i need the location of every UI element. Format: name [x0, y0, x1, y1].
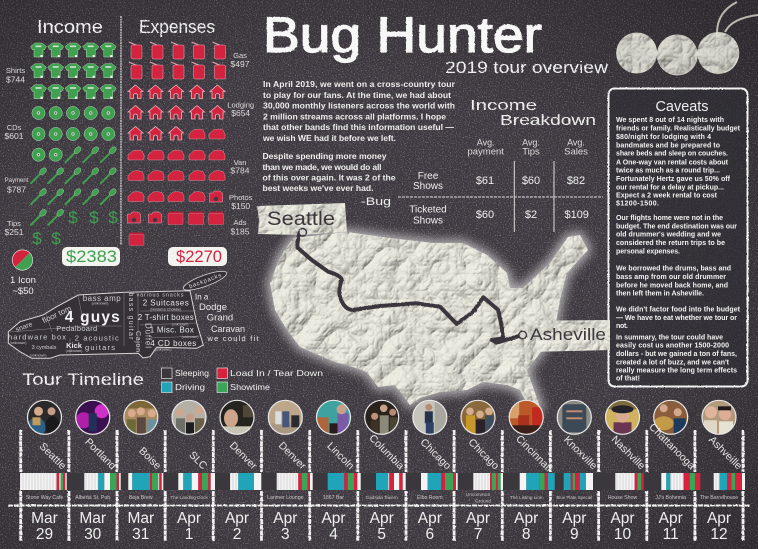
icons: tips dollar signs: $	[89, 208, 99, 227]
caveats text: We borrowed the drums, bass and	[616, 266, 731, 273]
intro text block	[262, 79, 456, 193]
caveats text: budget. The end destination was our	[616, 223, 737, 230]
subtitle: 2019 tour overview	[445, 58, 609, 77]
intro text block: than we made, we would do all	[262, 162, 382, 172]
icons: tips dollar signs	[32, 208, 118, 248]
icons: lodging houses	[128, 85, 225, 140]
label tape: Asheville: Asheville	[530, 325, 606, 344]
caveats text: — We have to eat whether we tour or	[616, 315, 737, 322]
city names: Ashveille	[706, 434, 744, 472]
timeline dates: Apr	[418, 510, 442, 527]
timeline dates: Mar	[31, 510, 58, 527]
caveats text: dollars - but we gained a ton of fans,	[616, 351, 737, 358]
city names: Portland	[82, 436, 118, 472]
intro text block: 30,000 monthly listeners across the world with	[263, 100, 455, 110]
city names: Denver	[227, 440, 260, 472]
timeline dates	[31, 510, 731, 543]
icons: CDs	[32, 106, 115, 161]
timeline legend: Driving	[175, 382, 205, 392]
packing labels: bass guitar	[127, 292, 134, 340]
heading: income breakdown	[470, 97, 596, 129]
city names: Lincoln	[324, 440, 356, 472]
timeline dates: 2	[233, 526, 241, 543]
venue names: The Landing Dock	[170, 495, 208, 500]
icon: paper bug	[616, 2, 758, 76]
packing labels: 4 CD boxes	[150, 339, 196, 348]
timeline dates: 11	[663, 526, 679, 543]
packing labels: (unknown)	[172, 322, 188, 326]
column headers: Avg.	[567, 138, 585, 148]
packing labels: (Holdall & Cholldie)	[150, 308, 181, 312]
category labels: expenses: $654	[231, 108, 250, 118]
timeline dates: Apr	[466, 510, 490, 527]
backpacks bubble	[182, 268, 228, 294]
timeline activity bars	[20, 473, 745, 490]
timeline dates: Apr	[370, 510, 394, 527]
venue names: Blue Plate Special	[556, 495, 592, 500]
van caption: Caravan	[211, 324, 245, 334]
timeline dates: 30	[84, 526, 102, 543]
label tape: Seattle	[257, 203, 347, 235]
caveats text: old drummer's wedding and we	[616, 232, 721, 239]
icons: tips dollar signs: $	[32, 229, 42, 248]
caveats text: really measure the long term effects	[616, 367, 737, 374]
caveats text: friends or family. Realistically budget	[616, 125, 741, 132]
photo: Chattanooga	[654, 400, 688, 434]
timeline dates: 29	[36, 526, 53, 543]
venue names: Stone Way Cafe	[26, 495, 63, 501]
packing labels: guitars	[85, 343, 115, 352]
backpacks bubble: backpacks	[188, 273, 222, 290]
icons: tips dollar signs: $	[68, 208, 78, 227]
venue names: Larimer Lounge	[267, 495, 304, 501]
timeline legend: Sleeping	[175, 368, 209, 378]
column headers: payment	[467, 146, 504, 158]
income breakdown table	[398, 97, 603, 232]
label tape: Seattle: Seattle	[267, 209, 335, 230]
expense icon grid	[128, 42, 226, 246]
row: ticketed shows: $60	[476, 209, 494, 221]
category labels: income: $601	[5, 131, 24, 141]
column headers	[467, 138, 588, 158]
row: free shows: $61	[476, 175, 494, 187]
city names: SLC	[186, 449, 210, 472]
caveats text: $1200-1500.	[616, 200, 659, 207]
legend: one icon value	[10, 250, 36, 297]
label tape: Asheville	[517, 320, 610, 352]
timeline dates: 6	[425, 526, 434, 543]
venue names: Gadsida Tavern	[366, 495, 398, 500]
packing labels: floor tom	[41, 304, 73, 325]
photo: Nashville	[606, 400, 640, 434]
timeline dates: Apr	[610, 510, 635, 527]
venue names: 1867 Bar	[323, 495, 344, 501]
venue names: Alberta St. Pub	[75, 495, 110, 501]
city names: Seattle	[37, 441, 68, 472]
income icon grid	[30, 43, 118, 248]
caveats text: bandmates and be prepared to	[616, 142, 720, 149]
timeline dates: Apr	[225, 510, 249, 527]
icons: gas tags	[129, 42, 226, 79]
panel: caveats	[608, 88, 748, 386]
heading: income: Income	[37, 17, 103, 37]
photo: Asheville	[702, 400, 736, 434]
category labels: income	[5, 66, 29, 237]
category labels: income: Tips	[7, 219, 21, 228]
caveats text: In summary, the tour could have	[616, 334, 723, 341]
caveats text: bass amp from our old drummer	[616, 274, 726, 281]
photo: Portland	[76, 400, 110, 434]
row: ticketed shows	[409, 204, 589, 226]
caveats text: Fortunately Hertz gave us 50% off	[616, 176, 731, 183]
timeline dates: Apr	[273, 510, 297, 527]
timeline dates: 1	[185, 526, 193, 543]
packing labels: Kick	[66, 341, 83, 350]
icons: tips dollar signs: $	[51, 229, 61, 248]
timeline chalk grid	[8, 430, 750, 541]
table grid	[398, 161, 603, 232]
timeline legend: Load In / Tear Down	[230, 368, 323, 378]
city names: Columbia	[367, 432, 406, 472]
packing labels: 3 cymbals	[32, 345, 57, 351]
city names	[37, 421, 744, 474]
intro text block: Despite spending more money	[262, 151, 387, 161]
caveats text: $80/night for lodging with 4	[616, 134, 711, 141]
photo: Lincoln	[316, 400, 350, 434]
map of USA with route	[257, 203, 610, 415]
city names: Chicago	[466, 436, 501, 472]
caveats text	[616, 117, 741, 383]
caveats text: not.	[616, 323, 628, 330]
category labels: expenses: $497	[231, 59, 250, 69]
city names: Knoxville	[561, 434, 599, 472]
intro text block: In April 2019, we went on a cross-country tour	[263, 79, 456, 89]
timeline dates: 9	[570, 526, 579, 543]
icons: cameras	[128, 191, 222, 223]
photo: Columbia	[365, 400, 399, 434]
timeline dates: Apr	[321, 510, 346, 527]
intro text block: of this over again. It was 2 of the	[262, 172, 396, 182]
panel: van packing diagram	[8, 268, 259, 358]
van caption: Dodge	[199, 302, 227, 313]
column headers: Sales	[564, 146, 588, 158]
category labels: expenses: $150	[231, 201, 250, 211]
icons: shirts	[30, 43, 116, 99]
category labels: expenses: $784	[231, 166, 250, 176]
timeline legend	[162, 368, 323, 392]
category labels: expenses: Lodging	[227, 100, 254, 110]
timeline dates: 5	[377, 526, 386, 543]
intro text block: to play for our fans. At the time, we had about	[263, 90, 451, 100]
caveats text: our rental for a delay at pickup...	[616, 184, 724, 191]
timeline dates: Apr	[562, 510, 586, 527]
packing labels: 1 Misc. Box	[150, 326, 194, 334]
heading: caveats: Caveats	[656, 98, 708, 115]
venue names: The Barrelhouse	[700, 495, 738, 501]
city names: Chattanooga	[646, 421, 697, 472]
caveats text: considered the return trips to be	[616, 240, 725, 247]
caveats text: easily cost us another 1500-2000	[616, 343, 729, 350]
photo: Chicago Apr 7	[461, 400, 495, 434]
category labels: income: Payment	[5, 178, 29, 184]
packing labels: various snacks	[136, 292, 184, 298]
venue names: Ground	[475, 498, 491, 504]
icons: tips dollar signs: $	[108, 208, 118, 227]
caveats text: We spent 8 out of 14 nights with	[616, 117, 724, 124]
van caption: we could fit	[206, 334, 259, 343]
photo: SLC	[172, 400, 206, 434]
timeline dates: Apr	[514, 510, 538, 527]
timeline legend: Showtime	[230, 382, 270, 392]
venue names: JJ's Bohemia	[655, 495, 686, 501]
heading: income breakdown: Breakdown	[500, 112, 596, 129]
row: free shows	[413, 171, 585, 192]
timeline dates: 3	[281, 526, 290, 543]
packing labels: (unknown)	[155, 348, 171, 352]
row: free shows: $60	[522, 175, 540, 187]
caveats text: We didn't factor food into the budget	[616, 307, 741, 314]
category labels: expenses: Photos	[229, 193, 253, 202]
city names: Denver	[276, 440, 309, 472]
venue names: Elbo Room	[417, 495, 443, 501]
row: free shows: Free	[418, 171, 439, 182]
row: free shows: Shows	[413, 181, 443, 192]
column headers: Avg.	[522, 138, 540, 148]
venue names: House Show	[608, 495, 637, 501]
packing labels: 2 Suitcases	[143, 298, 189, 308]
timeline photos	[28, 400, 736, 437]
packing labels: 2 acoustic	[75, 334, 119, 342]
caveats text: personal expenses.	[616, 248, 680, 255]
city names: Cincinnati	[513, 433, 554, 474]
packing labels: Cajon	[134, 331, 141, 352]
packing labels: bass amp	[83, 294, 121, 303]
heading: income breakdown: Income	[470, 97, 537, 114]
packing labels: (unknown)	[66, 349, 82, 353]
caveats text: A One-way van rental costs about	[616, 159, 729, 166]
intro text block: we wish WE had it before we left.	[262, 133, 396, 143]
caveats text: twice as much as a round trip...	[616, 168, 720, 175]
venue names	[26, 492, 738, 504]
packing labels	[8, 292, 198, 358]
packing labels: 2 T-shirt boxes	[138, 313, 194, 322]
category labels: income: CDs	[7, 123, 22, 132]
van outline	[8, 291, 203, 358]
icons: vans	[128, 129, 225, 202]
photo: Boise	[124, 400, 158, 434]
heading: tour timeline: Tour Timeline	[22, 370, 144, 389]
timeline dates: 10	[614, 526, 631, 543]
timeline dates: 4	[329, 526, 338, 543]
city names: Nashville	[609, 434, 647, 472]
timeline dates: Mar	[127, 510, 154, 527]
venue names: The Listing Lion	[510, 495, 543, 500]
category labels: income: $251	[5, 227, 24, 237]
photo: Knoxville	[557, 400, 591, 434]
packing labels: (unknown)	[92, 302, 108, 306]
timeline dates: 7	[474, 526, 482, 543]
heading: expenses: Expenses	[139, 17, 215, 37]
column headers: Tips	[522, 146, 540, 158]
total pill: income: $2383	[66, 247, 117, 266]
packing labels: Duffel	[144, 323, 153, 348]
caveats text: Our flights home were not in the	[616, 215, 723, 222]
icons: ad folders	[129, 212, 224, 246]
timeline dates: Apr	[659, 510, 683, 527]
packing labels: 4 guys	[65, 309, 120, 326]
category labels: expenses	[227, 51, 254, 236]
intro text block: that other bands find this information useful —	[263, 122, 454, 132]
photo: Seattle	[28, 400, 62, 437]
total pill: expenses: $2270	[176, 247, 222, 266]
legend: one icon value: ~$50	[12, 286, 34, 297]
intro text block: 2 million streams across all platforms. I hope	[263, 112, 446, 122]
photo: Cincinnati	[509, 400, 543, 434]
caveats text: created a lot of buzz, and we can't	[616, 359, 730, 366]
venue names: Uncommon	[466, 492, 491, 498]
caveats text: Expect a 2 week rental to cost	[616, 193, 718, 200]
row: free shows: $82	[567, 175, 585, 187]
intro text block: best weeks we've ever had.	[262, 183, 374, 193]
photo: Denver Apr 3	[268, 400, 302, 434]
van caption	[195, 292, 259, 343]
row: ticketed shows: $109	[564, 209, 589, 221]
title: Bug Hunter	[263, 7, 542, 63]
caveats text: then left them in Asheville.	[616, 290, 704, 297]
category labels: expenses: Gas	[233, 51, 247, 60]
packing labels: (unknown)	[30, 354, 46, 358]
caveats text: of that!	[616, 376, 640, 383]
packing labels: (unknown)	[10, 341, 26, 345]
row: ticketed shows: Shows	[413, 216, 443, 226]
category labels: income: Shirts	[6, 66, 25, 75]
city names: Boise	[136, 445, 163, 472]
timeline dates: 12	[710, 526, 728, 543]
column headers: Avg.	[477, 138, 495, 148]
row: ticketed shows: $2	[525, 209, 537, 221]
row: ticketed shows: Ticketed	[409, 204, 447, 216]
packing labels: (unknown)	[182, 335, 198, 339]
van caption: In a	[195, 292, 209, 302]
timeline dates: 31	[132, 526, 149, 543]
packing labels: hardware box	[8, 332, 66, 342]
signature: -Bug	[361, 196, 391, 208]
venue names: Beja Brew	[129, 495, 153, 501]
category labels: income: $744	[6, 74, 25, 84]
icons: microphones	[31, 145, 118, 225]
city names: Chicago	[418, 436, 453, 472]
panel: income and expenses pictograms	[5, 16, 254, 297]
photo: Denver Apr 2	[220, 400, 254, 434]
caveats text: before he moved back home, and	[616, 282, 728, 289]
caveats text: share beds and sleep on couches.	[616, 151, 728, 158]
timeline dates: Mar	[79, 510, 106, 527]
category labels: expenses: $185	[231, 226, 250, 236]
packing labels: Pedalboard	[56, 324, 97, 333]
van caption: Grand	[207, 312, 233, 324]
timeline dates: Apr	[707, 510, 731, 527]
category labels: expenses: Ads	[234, 218, 247, 227]
packing labels: snare	[15, 321, 34, 334]
legend: one icon value: 1 Icon	[10, 275, 36, 286]
category labels: income: $787	[7, 184, 26, 194]
timeline dates: 8	[522, 526, 531, 543]
timeline dates: Apr	[177, 510, 201, 527]
tour route	[297, 228, 526, 343]
photo: Chicago Apr 6	[413, 400, 447, 434]
category labels: expenses: Van	[234, 158, 246, 167]
